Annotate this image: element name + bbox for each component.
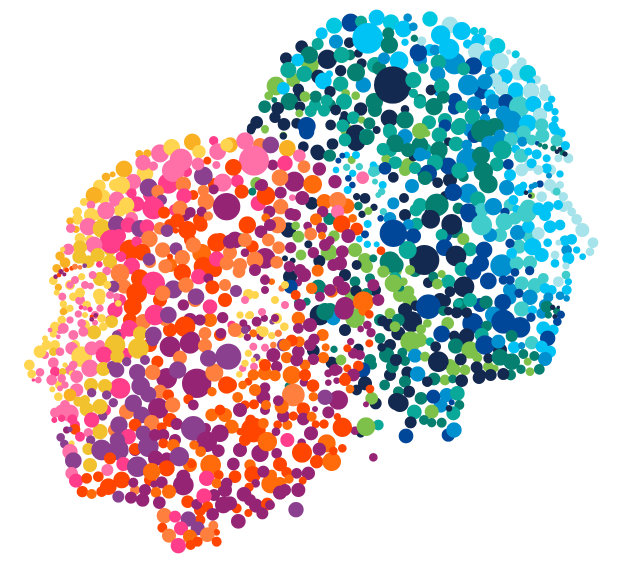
filler dots of warm head <box>41 169 365 516</box>
head: cool-coloured head facing right <box>247 10 598 443</box>
centre of cool head <box>399 123 432 203</box>
head: warm-coloured head facing left <box>24 134 365 553</box>
face and jaw of warm head <box>24 333 241 553</box>
crown and forehead of warm head <box>42 134 240 348</box>
overlap zone, lower right <box>223 301 405 528</box>
back of cool head <box>420 12 576 220</box>
overlap zone where both heads mingle, upper <box>223 124 407 316</box>
face and jaw of cool head <box>386 194 598 443</box>
filler dots of cool head <box>294 44 560 381</box>
crown of cool head <box>247 10 429 179</box>
